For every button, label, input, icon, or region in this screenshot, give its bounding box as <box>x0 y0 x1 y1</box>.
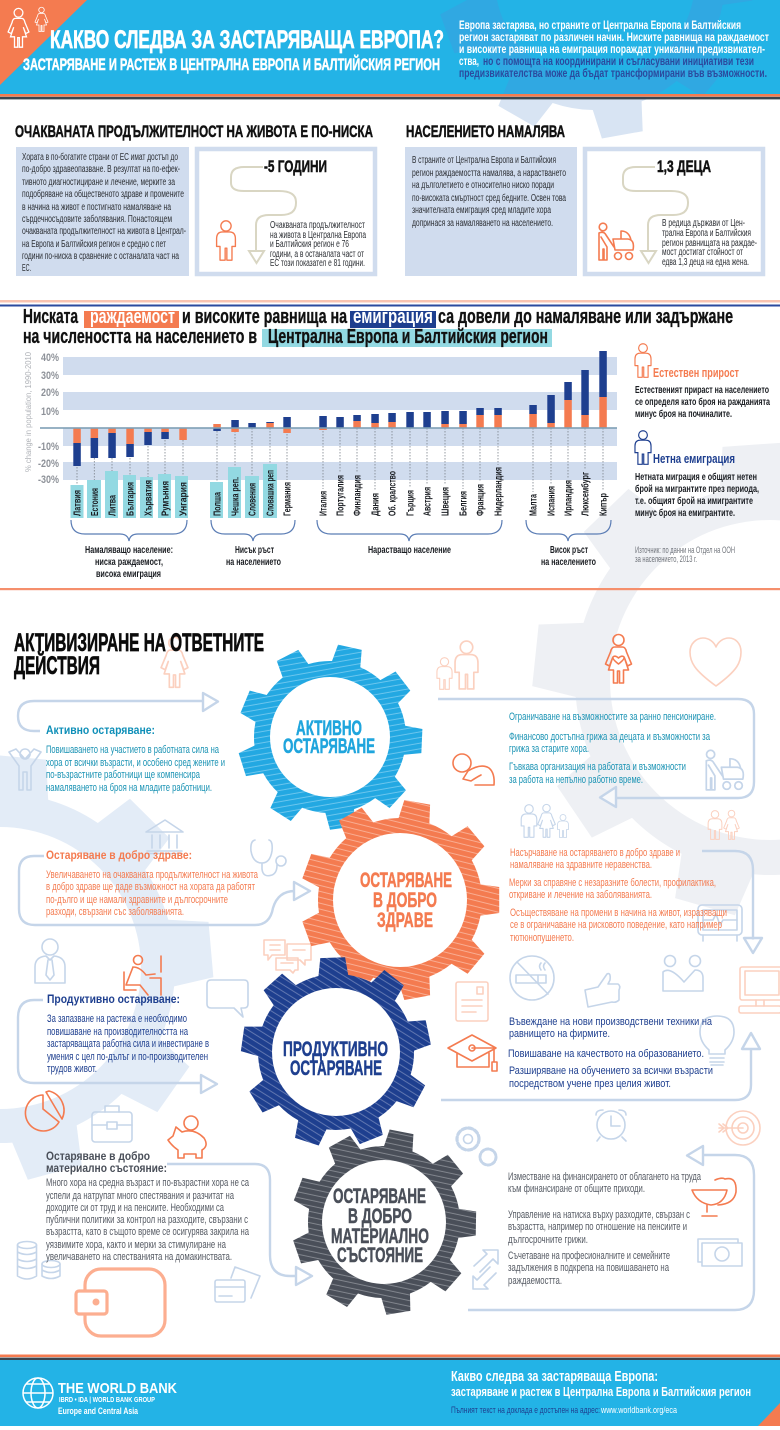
panel: life expectancy text: сърдечносъдовите заболявания. Понастоящем <box>22 213 172 225</box>
gear label: АКТИВНО <box>296 717 362 740</box>
footer title: Какво следва за застаряваща Европа: <box>451 1368 658 1385</box>
gear label: ОСТАРЯВАНЕ <box>283 735 375 758</box>
body: За запазване на растежа е необходимо <box>47 1013 187 1025</box>
text: financial ageing right: към финансиране от общите приходи. <box>508 1183 645 1195</box>
section rule <box>0 588 780 590</box>
body: Увеличаването на очакваната продължителност на живота <box>46 869 259 881</box>
bar chart: population change <box>23 351 617 580</box>
legend title: Естествен прирост <box>653 365 739 380</box>
text: financial ageing right: възрастта, например по отношение на пенсиите и <box>508 1221 687 1233</box>
body: доходите си от труд и на пенсиите. Необходими са <box>46 1202 225 1214</box>
y axis labels: -20% <box>38 458 59 470</box>
icon: banknotes <box>698 1239 742 1266</box>
arrow: financial ageing left <box>167 1164 312 1285</box>
legend text <box>635 471 759 519</box>
figure: 1.3 children: 1,3 ДЕЦА <box>657 157 711 176</box>
heading <box>46 1149 167 1175</box>
text: financial ageing right: раждаемостта. <box>508 1275 562 1287</box>
gear label: ПРОДУКТИВНО <box>283 1038 388 1061</box>
header intro text: ства, <box>459 54 479 68</box>
icon: person at desk <box>124 956 161 995</box>
footer <box>0 1354 780 1426</box>
header band <box>0 0 780 100</box>
title: activating responses: ДЕЙСТВИЯ <box>14 650 100 680</box>
group labels: Намаляващо население: <box>85 545 173 556</box>
body: възрастта, като в същото време се осигурява закрила на <box>46 1226 250 1238</box>
text: productive ageing left <box>47 992 209 1075</box>
chart heading: Ниската <box>23 306 79 328</box>
group labels: висока емиграция <box>96 569 161 580</box>
body: по-възрастните работници ще компенсира <box>46 769 201 781</box>
title: activating responses: АКТИВИЗИРАНЕ НА ОТВЕТНИТЕ <box>14 629 264 657</box>
icon: graduation cap <box>448 1035 497 1071</box>
body: трудов живот. <box>47 1063 97 1075</box>
text: active ageing right: за работа на непълно работно време. <box>509 774 643 786</box>
text: productive ageing right: посредством учене през целия живот. <box>509 1078 671 1090</box>
panel: 1.3 children <box>585 149 763 274</box>
group labels: на населението <box>226 557 281 568</box>
heading: Продуктивно остаряване: <box>47 992 180 1006</box>
country labels: Гърция <box>406 490 416 516</box>
gear: healthy ageing <box>302 800 499 1000</box>
country labels: България <box>126 482 136 516</box>
country labels: Латвия <box>72 490 84 516</box>
group labels: на населението <box>541 557 596 568</box>
country labels: Естония <box>90 488 101 516</box>
legend text: минус броя на емигрантите. <box>635 507 735 519</box>
gear label: МАТЕРИАЛНО <box>331 1225 429 1248</box>
chart heading: и високите равнища на <box>182 306 348 328</box>
icon: alarm clock <box>596 1110 626 1141</box>
legend: natural increase <box>635 344 770 420</box>
text: life expectancy numbers: на живота в Централна Европа <box>270 230 366 241</box>
panel: population text: значителната емиграция сред младите хора <box>412 205 551 216</box>
source note <box>635 545 735 564</box>
text: financial ageing right: Управление на натиска върху разходите, свързан с <box>508 1209 690 1221</box>
chart heading: емиграция <box>353 306 433 328</box>
gear label <box>283 1038 388 1080</box>
heading: Остаряване в добро здраве: <box>46 848 192 862</box>
icon: wallet <box>76 1269 165 1336</box>
text: healthy ageing right: Насърчаване на остаряването в добро здраве и <box>510 847 680 859</box>
text: fertility: мост достигат стойност от <box>662 247 743 258</box>
country labels: Кипър <box>598 493 610 516</box>
icon: no smoking <box>510 956 554 1000</box>
icon: handshake <box>663 956 703 991</box>
text: life expectancy numbers <box>270 220 366 269</box>
y axis labels: 40% <box>41 352 59 364</box>
country labels: Малта <box>528 494 540 516</box>
text: active ageing left <box>46 723 225 794</box>
panel: life expectancy text: очакваната продължителност на живота в Централ- <box>22 226 186 237</box>
group labels: Висок ръст <box>550 545 588 556</box>
body: Много хора на средна възраст и по-възрастни хора не са <box>46 1177 250 1189</box>
group labels: ниска раждаемост, <box>95 557 163 568</box>
country labels: Испания <box>546 486 558 516</box>
gear label: СЪСТОЯНИЕ <box>337 1244 423 1267</box>
icon: stethoscope <box>251 840 286 876</box>
text: productive ageing right: Въвеждане на нови производствени техники на <box>509 1016 713 1028</box>
text: productive ageing right <box>508 1016 713 1090</box>
country labels: Франция <box>476 484 486 516</box>
text: healthy ageing left <box>46 848 259 918</box>
body: увеличаването на спестванията на домакинствата. <box>46 1251 232 1263</box>
body: публични политики за контрол на разходите, свързани с <box>46 1214 248 1226</box>
country labels: Австрия <box>422 487 434 516</box>
panel: life expectancy text <box>16 147 189 276</box>
body: успели да натрупат много спестявания и разчитат на <box>46 1190 235 1202</box>
legend text: минус броя на починалите. <box>635 408 732 420</box>
panel: life expectancy text: по-добро здравеопазване. В резултат на по-ефек- <box>22 163 180 175</box>
body <box>47 1013 209 1075</box>
y axis labels: 20% <box>41 387 59 399</box>
text: financial ageing right: задължения в подкрепа на повишаването на <box>508 1262 670 1274</box>
text: healthy ageing right: намаляване на здравните неравенства. <box>510 859 652 871</box>
panel: population text: В страните от Централна Европа и Балтийския <box>412 155 556 166</box>
icon: coins <box>18 1242 60 1279</box>
country labels: Хърватия <box>144 480 154 516</box>
group brackets <box>71 520 611 541</box>
country labels: Италия <box>318 491 330 516</box>
icon: crawling baby <box>453 754 494 785</box>
arrow: productive ageing left <box>18 1000 217 1093</box>
icon: bowl of hygieia <box>692 1178 736 1216</box>
body: по-дълго и ще намали здравните и дългосрочните <box>46 894 228 906</box>
country labels: Об. кралство <box>386 471 398 516</box>
body: в добро здраве ще даде възможност на хората да работят <box>46 881 255 893</box>
panel: population text: регион раждаемостта намалява, а нарастването <box>412 168 566 179</box>
icon: piggy bank <box>168 1116 206 1158</box>
heading: Активно остаряване: <box>46 723 155 737</box>
body: Повишаването на участието в работната сила на <box>46 744 220 756</box>
icon: parent and child <box>437 641 478 689</box>
chart heading: Централна Европа и Балтийския регион <box>268 326 548 348</box>
country labels: Ирландия <box>564 480 574 516</box>
country labels: Швеция <box>440 487 452 516</box>
text: life expectancy numbers: и Балтийския регион е 76 <box>270 239 349 250</box>
background: large pale blue gear <box>0 737 230 1199</box>
panel: life expectancy text: тивното диагностициране и лечение, мерките за <box>22 177 175 188</box>
panel: life expectancy text: години по-ниска в сравнение с останалата част на <box>22 251 179 262</box>
legend: net migration <box>635 431 759 519</box>
arrow: financial ageing right <box>468 1146 754 1310</box>
text: productive ageing right: равнището на фирмите. <box>509 1028 610 1040</box>
text: productive ageing right: Повишаване на качеството на образованието. <box>508 1048 704 1060</box>
country labels <box>72 467 610 516</box>
country labels: Унгария <box>178 482 190 516</box>
heading: population decreasing: НАСЕЛЕНИЕТО НАМАЛЯВА <box>406 122 565 141</box>
country labels: Германия <box>282 482 294 516</box>
gear label: ОСТАРЯВАНЕ <box>333 1185 426 1208</box>
body <box>46 744 225 794</box>
gear label: ЗДРАВЕ <box>377 909 433 932</box>
panel: life expectancy text: подобряване на общественото здраве и промените <box>22 188 184 200</box>
icon: couple <box>708 810 739 839</box>
panel: life expectancy text: в начина на живот е постигнато намаляване на <box>22 202 171 213</box>
icon: pregnant woman <box>606 634 632 683</box>
y axis title: % change in population, 1990-2010 <box>23 352 33 472</box>
region: Europe and Central Asia <box>58 1406 139 1416</box>
country labels: Дания <box>370 493 382 516</box>
icon: credit cards <box>215 1267 260 1302</box>
body: застаряващата работна сила и инвестиране в <box>47 1038 209 1050</box>
icon: family <box>521 804 568 838</box>
text: active ageing right: грижа за старите хора. <box>509 743 589 755</box>
panel: population text <box>405 147 577 276</box>
organisation sub-line: IBRD • IDA | WORLD BANK GROUP <box>59 1397 155 1404</box>
legend text <box>635 385 770 420</box>
country label boxes <box>70 464 277 518</box>
footer link text: www.worldbank.org/eca <box>600 1405 678 1416</box>
arrow: active ageing left <box>18 693 218 731</box>
chart heading <box>23 306 733 348</box>
chart section top rule <box>0 300 780 306</box>
icon: navy person <box>635 431 651 464</box>
icon: globe <box>23 1378 53 1408</box>
icon: man with raised arms <box>9 749 41 790</box>
text: financial ageing right: Съчетаване на професионалните и семейните <box>508 1250 670 1262</box>
country labels: Нидерландия <box>494 467 504 516</box>
heading: материално състояние: <box>46 1161 167 1175</box>
body <box>46 1177 250 1263</box>
body <box>46 869 259 918</box>
icon: chat bubbles <box>264 940 311 973</box>
group labels: Нисък ръст <box>235 545 274 556</box>
icon: thumbs up <box>585 974 620 1007</box>
source note: за населението, 2013 г. <box>635 554 697 564</box>
legend title: Нетна емиграция <box>653 451 735 466</box>
country labels: Словашка реп <box>266 470 276 516</box>
body: разходи, свързани със заболяванията. <box>46 906 184 918</box>
panel: -5 years <box>197 149 375 274</box>
text: healthy ageing right <box>509 847 727 944</box>
footer link text: Пълният текст на доклада е достъпен на адрес: <box>451 1405 600 1416</box>
country labels: Люксембург <box>580 472 592 516</box>
icon: gears <box>457 1128 496 1165</box>
dotted leader lines <box>77 428 603 492</box>
title: activating responses <box>14 629 264 680</box>
icon: ECG monitor <box>698 905 742 941</box>
icon: elderly person <box>217 221 235 260</box>
panel: life expectancy text: на Европа и Балтийския регион е средно с пет <box>22 239 166 250</box>
figure: -5 years: -5 ГОДИНИ <box>264 157 327 176</box>
title: КАКВО СЛЕДВА ЗА ЗАСТАРЯВАЩА ЕВРОПА? <box>50 26 444 54</box>
country labels: Португалия <box>336 475 346 516</box>
icon: woman <box>161 637 188 687</box>
gear: productive ageing <box>209 924 464 1180</box>
icon: bank <box>146 820 183 854</box>
country labels: Белгия <box>458 491 470 516</box>
heading: life expectancy: ОЧАКВАНАТА ПРОДЪЛЖИТЕЛНОСТ НА ЖИВОТА Е ПО-НИСКА <box>15 122 373 141</box>
text: active ageing right: Гъвкава организация на работата и възможности <box>509 761 686 773</box>
y axis labels: -10% <box>38 441 59 453</box>
gear label: ОСТАРЯВАНЕ <box>360 869 452 892</box>
gear label: В ДОБРО <box>348 1205 412 1228</box>
body: умения с цел по-дълъг и по-производителен <box>47 1051 208 1063</box>
icon: heart <box>690 638 741 686</box>
country labels: Чешка реп. <box>230 477 242 516</box>
arrow: winding path <box>623 167 688 263</box>
group labels: Нарастващо население <box>368 545 451 556</box>
text: financial ageing right: дългосрочните грижи. <box>508 1234 588 1246</box>
country labels: Румъния <box>160 481 172 516</box>
icon: document <box>456 982 488 1021</box>
text: life expectancy numbers: години, а в останалата част от <box>270 249 364 260</box>
chart bands <box>63 357 617 480</box>
arrow: active ageing right <box>438 699 754 807</box>
icon: speech bubble <box>207 980 248 1017</box>
bars: net migration <box>73 351 607 466</box>
text: healthy ageing right: тютюнопушенето. <box>510 932 574 944</box>
panel: population text: допринася за намаляването на населението. <box>412 218 553 229</box>
country labels: Словения <box>248 483 258 516</box>
gear label <box>360 869 452 932</box>
gear: financially secure ageing <box>292 1128 478 1316</box>
country labels: Литва <box>108 495 118 516</box>
panel: life expectancy text: ЕС. <box>22 263 31 274</box>
gear label: ОСТАРЯВАНЕ <box>290 1057 382 1080</box>
header intro text <box>459 18 769 80</box>
icons: decorative line icons <box>9 634 780 1336</box>
background: large pale gray gear <box>457 365 780 997</box>
text: active ageing right <box>509 711 716 786</box>
y axis labels: 10% <box>41 406 59 418</box>
text: productive ageing right: Разширяване на обучението за всички възрасти <box>509 1065 713 1077</box>
body: повишаване на производителността на <box>47 1026 189 1038</box>
arrow: healthy ageing right <box>702 851 762 953</box>
gear label: В ДОБРО <box>373 889 437 912</box>
icon: orange person <box>635 344 651 377</box>
gear label <box>331 1185 429 1267</box>
icon: double arrows <box>473 1250 498 1289</box>
bars: natural increase <box>73 397 607 444</box>
chart heading: на числеността на населението в <box>23 326 257 348</box>
group labels <box>85 545 596 580</box>
subtitle: ЗАСТАРЯВАНЕ И РАСТЕЖ В ЦЕНТРАЛНА ЕВРОПА И БАЛТИЙСКИЯ РЕГИОН <box>23 55 440 74</box>
gear label <box>283 717 375 758</box>
text: financial ageing right <box>508 1171 702 1287</box>
arrow: healthy ageing left <box>19 856 310 925</box>
country labels: Финландия <box>352 475 364 516</box>
text: financial ageing left <box>46 1149 250 1263</box>
gear: active ageing <box>236 640 426 834</box>
organisation name: THE WORLD BANK <box>58 1380 177 1397</box>
zero axis <box>40 427 617 429</box>
arrow: winding path <box>231 167 296 263</box>
y axis labels: -30% <box>38 474 59 486</box>
body: хора от всички възрасти, и особено сред жените и <box>46 757 225 769</box>
World Bank logo <box>23 1378 177 1416</box>
chart heading: раждаемост <box>90 306 175 328</box>
icon: lightbulb <box>700 1016 734 1065</box>
heading: Остаряване в добро <box>46 1149 150 1163</box>
text: life expectancy numbers: Очакваната продължителност <box>270 220 365 231</box>
text: healthy ageing right: откриване и лечение на заболяванията. <box>509 889 652 901</box>
icon: pie chart <box>25 1091 64 1131</box>
icon: women <box>8 7 48 47</box>
body: намаляването на броя на младите работници. <box>46 782 212 794</box>
background: pale header gear, white area <box>498 100 646 138</box>
y axis labels <box>38 352 59 486</box>
icon: businessman <box>35 939 65 983</box>
panel: population text: по-високата смъртност сред бедните. Освен това <box>412 192 566 204</box>
text: fertility <box>662 218 757 268</box>
icon: mother with stroller <box>706 750 743 790</box>
icon: mother with stroller <box>599 223 633 260</box>
panel: population text: на дълголетието е относително ниско поради <box>412 180 554 191</box>
icon: target <box>719 1111 760 1145</box>
icon: computer <box>739 967 780 1013</box>
country labels: Полша <box>212 492 224 516</box>
arrow: productive ageing right <box>441 1033 760 1100</box>
panel: life expectancy text: Хората в по-богатите страни от ЕС имат достъп до <box>22 151 178 163</box>
y axis labels: 30% <box>41 370 59 382</box>
text: life expectancy numbers: ЕС този показател е 81 години. <box>270 258 365 269</box>
icon: briefcase <box>92 1106 132 1142</box>
body: уязвимите хора, както и мерки за стимулиране на <box>46 1239 227 1251</box>
